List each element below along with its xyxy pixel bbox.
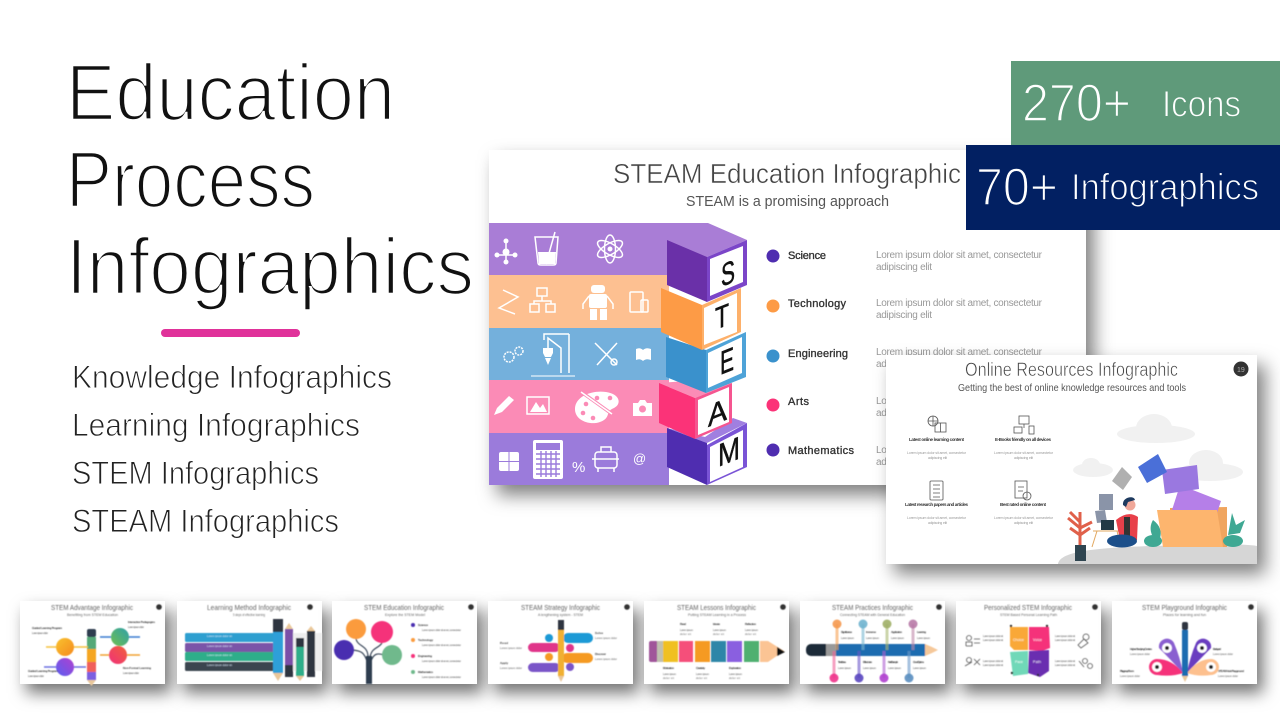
thumbnail: STEM Advantage: Lorem ipsum dolor xyxy=(28,674,44,678)
item: e-books: adipiscing elit xyxy=(1014,456,1033,460)
thumbnail: Personalized STEM: Lorem ipsum dolor sit xyxy=(1055,638,1075,642)
item: online learning content: Lorem ipsum dolor sit amet, consectetur xyxy=(907,451,967,455)
thumbnail: STEAM Lessons: dolor sit xyxy=(745,632,756,636)
item: online learning content xyxy=(907,416,967,460)
icons: mathematics row xyxy=(499,440,646,479)
thumbnail: STEAM Practices: Test Ideas xyxy=(838,660,846,664)
title: Education xyxy=(66,48,395,137)
thumbnail: Personalized STEM: Choice xyxy=(1013,638,1024,642)
cube E: E xyxy=(720,341,734,383)
thumbnail: STEAM Lessons: dolor sit xyxy=(729,676,740,680)
list of infographic categories: STEAM Infographics xyxy=(72,503,339,539)
thumbnail: STEM Education: Engineering xyxy=(418,654,432,658)
thumbnail: Learning Method: Lorem ipsum dolor sit xyxy=(207,645,232,648)
icons: mathematics row: % xyxy=(572,459,585,476)
item: research papers: Lorem ipsum dolor sit amet, consectetur xyxy=(907,516,967,520)
cube E xyxy=(666,332,746,393)
thumbnail: STEM Advantage: Lorem ipsum dolor xyxy=(123,671,139,675)
thumbnail: STEAM Lessons: dolor sit xyxy=(663,676,674,680)
thumbnail: STEM Advantage xyxy=(20,601,165,686)
legend: science: Lorem ipsum dolor sit amet, consectetur xyxy=(876,250,1043,261)
thumbnail: STEAM Lessons: dolor sit xyxy=(696,676,707,680)
legend: science: adipiscing elit xyxy=(876,262,932,273)
thumbnail: STEAM Practices: Lorem ipsum xyxy=(866,636,879,640)
thumbnail: STEAM Practices: Lorem ipsum xyxy=(888,666,901,670)
thumbnail: STEM Playground: Playgroup Room xyxy=(1120,669,1134,673)
legend: technology xyxy=(766,298,1043,321)
cube M: M xyxy=(718,430,740,475)
icons: engineering row xyxy=(504,334,651,376)
thumbnail: STEAM Lessons: Exploration xyxy=(729,666,741,670)
title: Infographics xyxy=(66,222,474,311)
item: e-books: Lorem ipsum dolor sit amet, consectetur xyxy=(994,451,1054,455)
thumbnail: STEAM Practices: Lorem ipsum xyxy=(917,636,930,640)
legend: mathematics: Lorem ipsum dolor sit amet, consectetur xyxy=(876,445,1043,456)
icons: mathematics row: @ xyxy=(633,451,646,466)
thumbnail: Personalized STEM: Pace xyxy=(1015,660,1023,664)
cube M xyxy=(667,418,747,485)
thumbnail: STEM Playground: STEM Playground Infographic xyxy=(1142,603,1227,612)
thumbnail: STEAM Strategy: Lorem ipsum dolor xyxy=(500,646,522,650)
thumbnail: STEAM Lessons: Motivation xyxy=(663,666,674,670)
thumbnail: STEM Advantage: Guided Learning Program xyxy=(32,626,62,630)
legend: mathematics: Mathematics xyxy=(788,445,854,457)
thumbnail: STEAM Practices: STEAM Practices Infographic xyxy=(832,603,913,612)
thumbnail: STEM Education: Science xyxy=(418,623,428,627)
thumbnail: STEAM Strategy: Lorem ipsum dolor xyxy=(595,657,617,661)
item: e-books: E-Books friendly on all devices xyxy=(995,437,1051,442)
thumbnail: STEAM Strategy: Apply xyxy=(500,661,508,665)
thumbnail: Personalized STEM: Lorem ipsum dolor sit xyxy=(1055,663,1075,667)
legend: science xyxy=(766,250,1043,273)
cube T xyxy=(661,288,741,350)
icons: arts row xyxy=(494,391,652,423)
list of infographic categories xyxy=(72,359,392,539)
thumbnail: STEAM Practices: Lorem ipsum xyxy=(838,666,851,670)
icons: science row xyxy=(494,232,625,265)
legend: engineering: adipiscing elit xyxy=(876,359,932,370)
list of infographic categories: STEM Infographics xyxy=(72,455,319,491)
thumbnail: STEM Education: Lorem ipsum dolor sit amet, consectetur xyxy=(422,675,461,679)
legend: arts: adipiscing elit xyxy=(876,408,932,419)
thumbnail: Personalized STEM: Lorem ipsum dolor sit xyxy=(983,638,1003,642)
thumbnail: STEM Education: Technology xyxy=(418,638,433,642)
item: research papers xyxy=(905,481,968,525)
thumbnail: Personalized STEM: Personalized STEM Infographic xyxy=(984,603,1072,612)
legend: arts xyxy=(766,396,1043,419)
badge: 70+ infographics: 70+ xyxy=(976,158,1058,217)
thumbnail: STEAM Practices xyxy=(800,601,945,684)
thumbnail: STEM Playground: Lorem ipsum dolor xyxy=(1120,674,1140,678)
item: e-books xyxy=(994,416,1054,460)
item: online learning content: Latest online learning content xyxy=(909,437,964,442)
thumbnail: STEAM Practices: Lorem ipsum xyxy=(913,666,926,670)
legend: science: Science xyxy=(788,250,826,262)
thumbnail: STEAM Practices: Connecting STEAM with General Education xyxy=(840,612,905,617)
legend: technology: adipiscing elit xyxy=(876,310,932,321)
thumbnail: STEAM Strategy: Lorem ipsum dolor xyxy=(595,636,617,640)
thumbnail: STEM Playground: Higher Studying Centers xyxy=(1130,647,1152,651)
list of infographic categories: Learning Infographics xyxy=(72,407,360,443)
thumbnail: STEAM Strategy: Discover xyxy=(595,652,607,656)
thumbnail: STEAM Practices: Immerse xyxy=(866,630,876,634)
thumbnail: STEM Playground xyxy=(1112,601,1257,684)
item: best rated content: Lorem ipsum dolor sit amet, consectetur xyxy=(994,516,1054,520)
badge: 70+ infographics xyxy=(966,145,1280,230)
thumbnail: STEAM Practices: Lorem ipsum xyxy=(891,636,904,640)
thumbnail: STEAM Lessons: dolor sit xyxy=(680,632,691,636)
thumbnail: STEM Advantage: Benefiting from STEM Education xyxy=(67,612,118,617)
thumbnail: STEAM Practices: Learning xyxy=(917,630,926,634)
item: best rated content xyxy=(994,481,1054,525)
thumbnail: STEM Education: Lorem ipsum dolor sit amet, consectetur xyxy=(422,628,461,632)
badge: 270+ icons: 270+ xyxy=(1022,74,1131,133)
list of infographic categories: Knowledge Infographics xyxy=(72,359,392,395)
thumbnail: STEAM Lessons: Creativity xyxy=(696,666,705,670)
cube A xyxy=(659,380,732,439)
legend: mathematics xyxy=(766,444,1043,468)
pink accent bar xyxy=(161,329,300,337)
thumbnail: STEAM Lessons: Reflection xyxy=(745,622,756,626)
coloured bands xyxy=(489,223,747,485)
thumbnail: Personalized STEM xyxy=(956,601,1101,684)
thumbnail: Personalized STEM: Lorem ipsum dolor sit xyxy=(983,659,1003,663)
cube S: S xyxy=(721,253,735,295)
thumbnail: STEAM Lessons: Lorem ipsum xyxy=(745,628,758,632)
title: Process xyxy=(66,135,315,224)
badge: 70+ infographics: Infographics xyxy=(1071,166,1259,208)
item: best rated content: adipiscing elit xyxy=(1014,521,1033,525)
thumbnail: Personalized STEM: Lorem ipsum dolor sit xyxy=(983,634,1003,638)
thumbnail: STEAM Lessons: Lorem ipsum xyxy=(729,672,742,676)
thumbnail: STEM Playground: Lorem ipsum dolor xyxy=(1218,674,1238,678)
panel: Online Resources slide xyxy=(886,355,1257,564)
thumbnail: STEAM Strategy xyxy=(488,601,633,684)
legend: arts: Arts xyxy=(788,396,810,408)
thumbnail: Learning Method: Lorem ipsum dolor sit xyxy=(207,635,232,638)
thumbnail: STEAM Practices: Next Example xyxy=(888,660,898,664)
thumbnail: STEAM Practices: Application xyxy=(891,630,902,634)
thumbnail: STEAM Lessons: Putting STEAM Learning in a Process xyxy=(688,612,746,617)
cube A: A xyxy=(708,391,727,434)
thumbnail: STEAM Practices: Significance xyxy=(841,630,852,634)
thumbnail: STEAM Lessons xyxy=(644,601,789,684)
thumbnail: Learning Method: Learning Method Infographic xyxy=(207,603,291,612)
item: best rated content: Best rated online content xyxy=(1000,502,1046,507)
item: research papers: adipiscing elit xyxy=(928,521,947,525)
legend: arts: Lorem ipsum dolor sit amet, consectetur xyxy=(876,396,1043,407)
thumbnail: Learning Method: Lorem ipsum dolor sit xyxy=(207,654,232,657)
item: online learning content: adipiscing elit xyxy=(928,456,947,460)
thumbnail: Personalized STEM: Lorem ipsum dolor sit xyxy=(1055,659,1075,663)
thumbnail: STEM Playground: Backyard xyxy=(1213,647,1221,651)
panel: STEAM Education slide xyxy=(489,150,1086,485)
legend: mathematics: adipiscing elit xyxy=(876,457,932,468)
thumbnail: STEM Advantage: STEM Advantage Infographic xyxy=(51,603,133,612)
thumbnail: STEAM Practices: Effect size xyxy=(863,660,872,664)
thumbnail: STEAM Lessons: Read xyxy=(680,622,686,626)
cube S xyxy=(667,240,747,302)
badge: 270+ icons xyxy=(1011,61,1280,145)
thumbnail: STEM Education: Explore the STEM Model xyxy=(385,612,425,617)
title xyxy=(66,48,474,311)
thumbnail: STEM Playground: Lorem ipsum dolor xyxy=(1213,652,1233,656)
icons: technology row xyxy=(499,285,648,320)
thumbnail: STEM Advantage: Guided Learning Program xyxy=(28,669,58,673)
thumbnail: STEAM Lessons: Ideate xyxy=(713,622,720,626)
thumbnail: Personalized STEM: Lorem ipsum dolor sit xyxy=(1055,634,1075,638)
thumbnail: STEAM Lessons: Lorem ipsum xyxy=(663,672,676,676)
thumbnail: Personalized STEM: Lorem ipsum dolor sit xyxy=(983,663,1003,667)
thumbnail: STEAM Strategy: Read xyxy=(500,641,508,645)
thumbnail: STEAM Lessons: Lorem ipsum xyxy=(713,628,726,632)
thumbnail: STEM Playground: Places for learning and fun xyxy=(1163,612,1206,617)
illustration: person with folder and floating files xyxy=(1058,414,1257,564)
thumbnail: STEM Education: Mathematics xyxy=(418,670,433,674)
cube T: T xyxy=(715,296,729,337)
legend: technology: Lorem ipsum dolor sit amet, consectetur xyxy=(876,298,1043,309)
slide subheading: Getting the best of online knowledge resources and tools xyxy=(958,382,1186,394)
badge: 270+ icons: Icons xyxy=(1162,84,1241,124)
legend: engineering xyxy=(766,347,1043,370)
thumbnail: STEM Education: STEM Education Infographic xyxy=(364,603,444,612)
thumbnail: STEAM Strategy: STEAM Strategy Infographic xyxy=(521,603,600,612)
thumbnail: Personalized STEM: Voice xyxy=(1033,638,1042,642)
thumbnail: STEM Advantage: Interactive Pedagogies xyxy=(128,620,155,624)
thumbnail: STEM Education: Lorem ipsum dolor sit amet, consectetur xyxy=(422,659,461,663)
thumbnail: Learning Method: Lorem ipsum dolor sit xyxy=(207,664,232,667)
thumbnail: STEAM Lessons: Lorem ipsum xyxy=(696,672,709,676)
thumbnail: STEM Advantage: Lorem ipsum dolor xyxy=(128,625,144,629)
thumbnail: STEAM Practices: Lorem ipsum xyxy=(841,636,854,640)
slide number xyxy=(1234,362,1248,376)
slide heading: Online Resources Infographic xyxy=(965,360,1178,381)
thumbnail: Learning Method: 5 steps of effective learning xyxy=(233,612,265,617)
thumbnail: STEAM Lessons: STEAM Lessons Infographic xyxy=(677,603,756,612)
slide number: 19 xyxy=(1237,367,1245,374)
thumbnail: STEM Playground: STEAM Hub Playground xyxy=(1218,669,1244,673)
thumbnail: STEAM Strategy: Lorem ipsum dolor xyxy=(500,666,522,670)
legend: engineering: Lorem ipsum dolor sit amet, consectetur xyxy=(876,347,1043,358)
thumbnail: Learning Method xyxy=(177,601,322,684)
thumbnail: STEM Education: Lorem ipsum dolor sit amet, consectetur xyxy=(422,643,461,647)
legend: engineering: Engineering xyxy=(788,348,848,360)
thumbnail: STEM Playground: Lorem ipsum dolor xyxy=(1130,652,1150,656)
thumbnail: STEAM Strategy: Solve xyxy=(595,631,603,635)
slide subheading: STEAM is a promising approach xyxy=(686,193,889,210)
slide heading: STEAM Education Infographic xyxy=(613,158,961,189)
thumbnail: STEM Advantage: Non-Formal Learning xyxy=(123,666,151,670)
thumbnail: STEAM Lessons: dolor sit xyxy=(713,632,724,636)
thumbnail: STEAM Strategy: A lengthening system - STEM xyxy=(538,612,583,617)
thumbnail: STEAM Practices: Good Options xyxy=(913,660,924,664)
thumbnail: STEAM Lessons: Lorem ipsum xyxy=(680,628,693,632)
thumbnail: STEAM Practices: Lorem ipsum xyxy=(863,666,876,670)
item: research papers: Latest research papers and articles xyxy=(905,502,968,507)
thumbnail: Personalized STEM: STEM Based Personal Learning Path xyxy=(1000,612,1057,617)
thumbnail: STEM Education xyxy=(332,601,477,684)
thumbnail: STEM Advantage: Lorem ipsum dolor xyxy=(32,631,48,635)
thumbnail: Personalized STEM: Path xyxy=(1033,660,1041,664)
legend: technology: Technology xyxy=(788,298,846,310)
